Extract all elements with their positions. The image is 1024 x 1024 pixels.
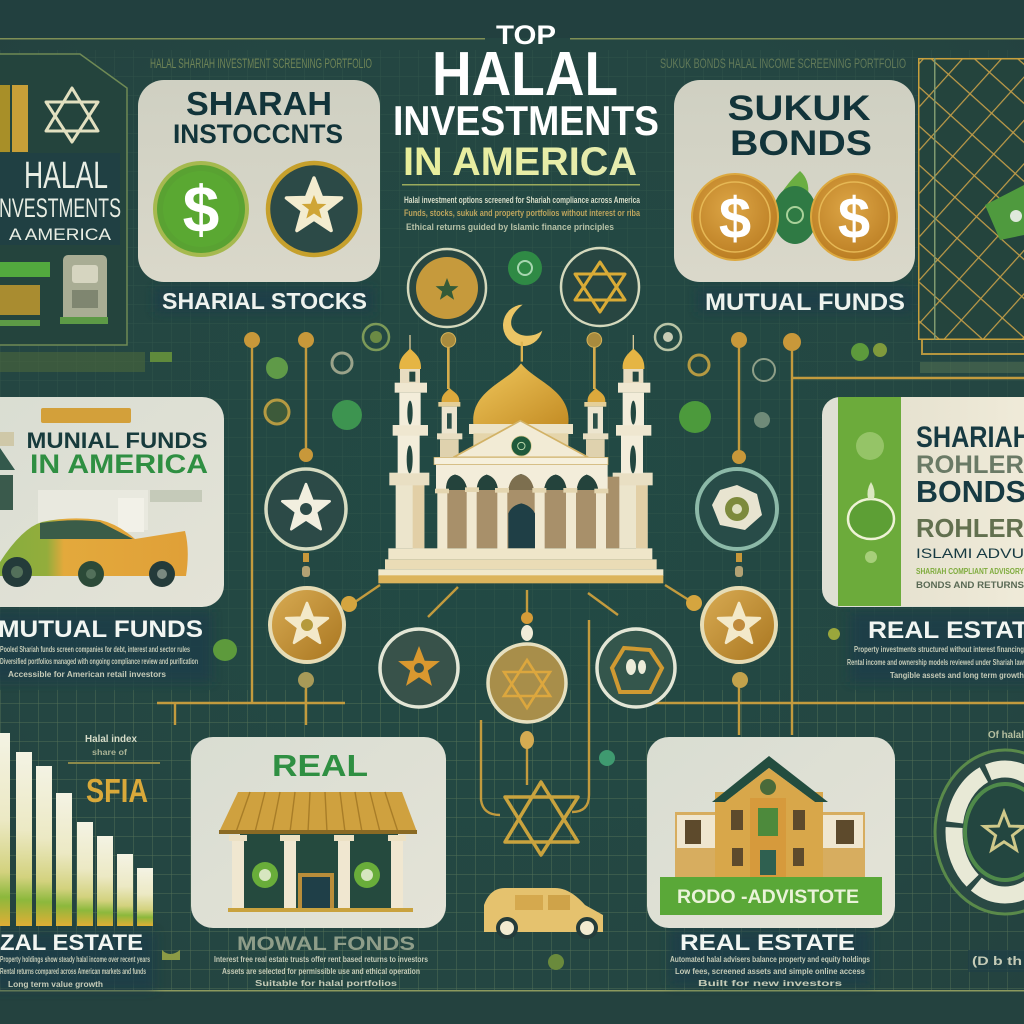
medallion: lotus <box>697 469 777 549</box>
title description: Funds, stocks, sukuk and property portfolios without interest or riba <box>404 208 641 218</box>
mutual funds description: Pooled Shariah funds screen companies for debt, interest and sector rules <box>0 645 190 654</box>
green banner <box>660 877 882 915</box>
chart description: Property holdings show steady halal income over recent years <box>0 955 150 964</box>
icon: green dollar coin <box>155 163 247 255</box>
medallion: gold leaf <box>408 249 486 327</box>
title description: Halal investment options screened for Shariah compliance across America <box>404 195 641 205</box>
icon: gold coin two <box>811 174 897 260</box>
lattice base frame <box>922 340 1024 354</box>
poster title <box>0 155 121 244</box>
poster title: NVESTMENTS <box>0 193 121 223</box>
icon: hexagram <box>46 88 98 142</box>
medallion: gold star right <box>702 588 776 662</box>
green and gold blocks <box>0 262 50 326</box>
chart caption: SFIA <box>86 772 148 809</box>
panel: mutual funds in america card <box>0 397 224 607</box>
real estate description right <box>847 645 1024 680</box>
outer minarets <box>389 335 653 548</box>
card text: BONDS AND RETURNS <box>916 580 1024 590</box>
house description: Built for new investors <box>698 979 843 988</box>
medallion: center gold hexagram <box>488 644 566 722</box>
real description: Interest free real estate trusts offer rent based returns to investors <box>214 955 428 964</box>
gold tab <box>41 408 131 423</box>
label shadows <box>0 288 1024 990</box>
chart description: Rental returns compared across American markets and funds <box>0 967 146 976</box>
inner minarets <box>437 333 608 457</box>
right caption: (D b th <box>972 954 1022 968</box>
title: INVESTMENTS <box>393 97 659 144</box>
label: shariah stocks: SHARIAL STOCKS <box>162 288 367 314</box>
card heading <box>26 428 208 479</box>
chart caption <box>68 734 160 809</box>
panel: sukuk bonds card <box>674 80 915 282</box>
card heading: REAL <box>272 748 368 783</box>
card heading: SUKUK <box>728 89 870 128</box>
panel: shariah bonds card <box>822 397 1024 607</box>
faint backdrop <box>38 490 202 532</box>
panel: real card <box>191 737 446 928</box>
small header caption left: HALAL SHARIAH INVESTMENT SCREENING PORTFOLIO <box>150 55 372 71</box>
poster title: HALAL <box>24 155 108 197</box>
gold bars <box>0 85 28 152</box>
medallion: white star <box>266 469 346 549</box>
card heading <box>728 89 872 163</box>
panel: robo advisors house card <box>647 737 895 928</box>
arched wall <box>436 463 608 490</box>
label: mutual ponds: MOWAL FONDS <box>237 934 415 955</box>
icon: green drop <box>848 432 894 563</box>
icon: green dollar coin: $ <box>183 172 219 246</box>
card heading: SHARAH <box>186 85 332 122</box>
card text: ROHLER <box>916 451 1024 479</box>
crescent <box>503 305 542 346</box>
mutual funds description: Diversified portfolios managed with ongoing compliance review and purification <box>0 657 198 666</box>
illustration: car <box>0 518 188 587</box>
connector lines <box>157 345 1024 815</box>
right caption: Of halal <box>988 730 1024 741</box>
label: real estate right: REAL ESTAT <box>868 617 1024 644</box>
pediment <box>453 421 588 457</box>
icon: gold star outline <box>505 782 578 855</box>
mutual funds description: Accessible for American retail investors <box>8 670 167 679</box>
medallion: green spiral <box>508 251 542 285</box>
title description: Ethical returns guided by Islamic finance principles <box>406 222 614 232</box>
card text <box>916 421 1024 590</box>
pin connectors <box>341 595 702 612</box>
real description <box>214 955 428 988</box>
poster title: A AMERICA <box>9 225 112 244</box>
icon: van <box>484 888 603 937</box>
right caption <box>968 730 1024 972</box>
medallion: gold star left <box>270 588 344 662</box>
label: real estate chart: ZAL ESTATE <box>0 930 143 955</box>
icon: mosque fragment <box>0 432 15 510</box>
icon: dark star coin <box>268 163 360 255</box>
portico interior <box>440 477 619 548</box>
label: mutual funds: MUTUAL FUNDS <box>705 289 905 316</box>
title description <box>404 195 641 232</box>
card text: ISLAMI ADVU <box>916 545 1024 561</box>
decorative small icons <box>0 324 1024 970</box>
card heading: IN AMERICA <box>30 449 208 479</box>
panel: left halal poster <box>0 54 127 345</box>
icon: right ring dial <box>935 750 1024 914</box>
house description: Automated halal advisers balance property and equity holdings <box>670 955 870 964</box>
card heading: INSTOCCNTS <box>173 119 343 149</box>
door <box>508 503 535 548</box>
card heading: BONDS <box>730 124 872 163</box>
chart description <box>0 955 150 989</box>
illustration: mosque <box>378 305 663 583</box>
real description: Assets are selected for permissible use and ethical operation <box>222 967 420 976</box>
green banner: RODO -ADVISTOTE <box>677 887 859 908</box>
label: real estate: REAL ESTATE <box>680 930 855 955</box>
dome <box>473 363 569 424</box>
chart description: Long term value growth <box>8 980 103 989</box>
real description: Suitable for halal portfolios <box>255 979 398 988</box>
illustration: colonnaded building <box>219 792 417 912</box>
icon: gold coin two: $ <box>838 186 870 251</box>
panel: geometric lattice <box>918 58 1024 340</box>
icon: green leaf <box>773 171 817 244</box>
card heading: MUNIAL FUNDS <box>26 428 208 453</box>
icon: gold coin one <box>692 174 778 260</box>
title: TOP <box>496 20 556 50</box>
device icon <box>60 255 108 324</box>
medallion: dark gold star <box>380 629 458 707</box>
medallion: dark gold octagon <box>597 629 675 707</box>
card heading <box>173 85 343 149</box>
house description <box>670 955 870 988</box>
steps <box>378 548 663 583</box>
illustration: house <box>675 756 865 878</box>
title <box>393 20 659 184</box>
chart caption: Halal index <box>85 734 137 745</box>
title: IN AMERICA <box>403 140 637 184</box>
card text: ROHLER <box>916 513 1024 543</box>
medallion: gold hexagram <box>561 248 639 326</box>
house description: Low fees, screened assets and simple online access <box>675 967 866 976</box>
label: mutual funds left: MUTUAL FUNDS <box>0 616 203 643</box>
panel: shariah stocks card <box>138 80 380 282</box>
bar chart <box>0 733 153 926</box>
title: HALAL <box>432 40 618 109</box>
mutual funds description <box>0 645 198 679</box>
chart caption: share of <box>92 748 127 757</box>
icon: gold coin one: $ <box>719 186 751 251</box>
columns <box>437 489 606 549</box>
